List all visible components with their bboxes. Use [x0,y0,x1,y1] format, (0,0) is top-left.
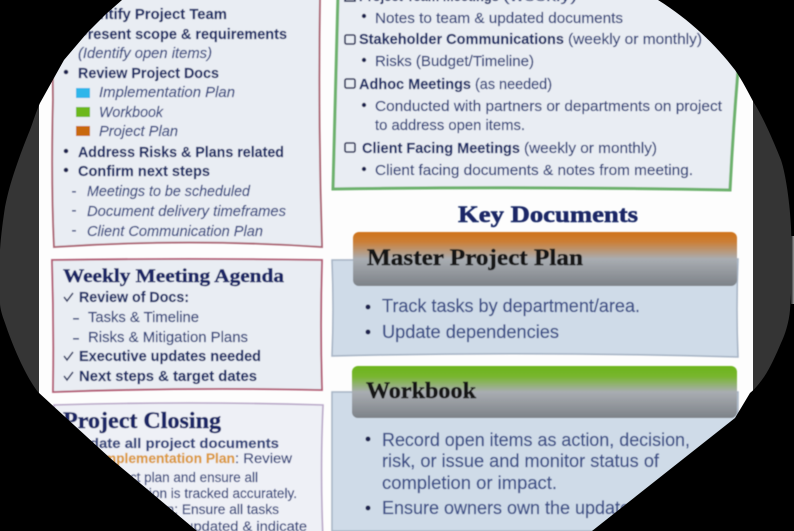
meeting: adhoc: Adhoc Meetings [359,76,471,93]
closing text: Update all project documents [70,436,279,451]
agenda checklist: Executive updates needed [79,348,261,365]
meeting: adhoc: Conducted with partners or departments on project [375,98,723,115]
workbook bullets: Ensure owners own the updates. [382,498,644,518]
kickoff agenda text: Project Plan [99,124,178,140]
closing text [70,436,307,531]
closing text: Implementation Plan [100,451,235,466]
kickoff agenda text: Implementation Plan [99,85,235,101]
kickoff agenda text: Document delivery timeframes [87,204,286,220]
meeting: client facing [345,140,693,179]
meeting: project team: Notes to team & updated documents [375,10,623,27]
right edge highlight [791,236,794,304]
panel: weekly meeting agenda [52,259,322,392]
panel: meetings and communications [333,0,745,190]
heading: project closing: Project Closing [63,408,222,433]
meeting: stakeholder communications [345,31,702,70]
kickoff agenda text [64,6,287,240]
kickoff agenda text: Meetings to be scheduled [87,184,251,200]
kickoff agenda text: Present scope & requirements [78,26,287,43]
agenda checklist: Tasks & Timeline [88,309,199,326]
closing text: project plan and ensure all [100,470,258,485]
workbook bullets: Record open items as action, decision, [382,430,690,450]
meeting: project team [345,0,623,27]
kickoff agenda text: (Identify open items) [78,46,212,62]
meeting: stakeholder communications: Stakeholder Communications [359,31,564,48]
meeting: stakeholder communications: (weekly or monthly) [568,31,702,48]
workbook bullets [366,430,690,518]
master plan bullets: Update dependencies [382,322,559,342]
workbook bullets: completion or impact. [382,473,557,493]
panel: project kickoff [52,0,322,247]
agenda checklist: Risks & Mitigation Plans [88,329,248,346]
title: master project plan: Master Project Plan [367,245,583,270]
meeting: client facing: Client facing documents & notes from meeting. [375,162,693,179]
kickoff agenda text: Identify Project Team [78,6,227,23]
closing text: : Review [235,451,292,466]
heading: key documents: Key Documents [458,202,638,227]
kickoff agenda text: Address Risks & Plans related [78,144,284,161]
card: workbook [332,366,738,531]
meeting: adhoc: (as needed) [475,76,552,93]
closing text: information is tracked accurately. [100,486,297,501]
agenda checklist: Next steps & target dates [79,368,257,385]
closing text: Project Plan: Ensure all tasks [100,502,279,517]
meeting: client facing: Client Facing Meetings [362,140,520,157]
meeting: adhoc: to address open items. [375,117,525,134]
meeting: adhoc [345,76,723,134]
panel: project closing [54,403,323,531]
kickoff agenda text: Confirm next steps [78,163,210,180]
kickoff agenda text: Review Project Docs [78,65,219,82]
meeting: client facing: (weekly or monthly) [524,140,657,157]
workbook bullets: risk, or issue and monitor status of [382,451,660,471]
heading: weekly meeting agenda: Weekly Meeting Agenda [63,266,285,287]
title: workbook: Workbook [366,378,476,403]
kickoff agenda text: Client Communication Plan [87,224,263,240]
meeting: stakeholder communications: Risks (Budget/Timeline) [375,53,534,70]
agenda checklist [64,289,261,385]
kickoff agenda text: Workbook [99,105,164,121]
master plan bullets: Track tasks by department/area. [382,296,640,316]
master plan bullets [366,296,640,342]
card: master project plan [332,232,738,357]
agenda checklist: Review of Docs: [79,289,189,306]
